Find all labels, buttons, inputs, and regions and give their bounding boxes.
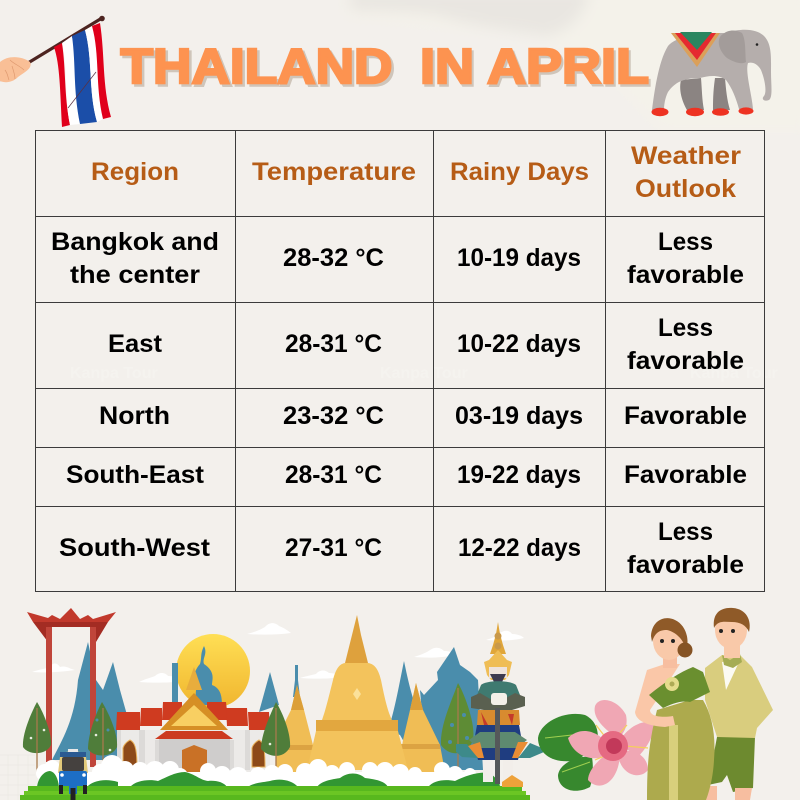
row: South-West: 12-22 days: [458, 534, 581, 562]
row: East: Less: [658, 314, 713, 342]
weather table: [35, 130, 765, 592]
faint grid patch: [0, 755, 35, 800]
row: South-West: favorable: [627, 551, 744, 579]
row: North: 23-32 °C: [283, 402, 384, 430]
giant swing: [27, 608, 116, 767]
row: South-East: 28-31 °C: [285, 461, 382, 489]
title: THAILAND: [120, 40, 392, 94]
table header row: Weather: [631, 142, 741, 170]
couple in traditional dress: [635, 608, 773, 800]
row: Bangkok and the center: the center: [70, 261, 200, 289]
row: East: 28-31 °C: [285, 330, 382, 358]
row: South-West: [59, 518, 744, 579]
icon: hand holding Thai flag: [0, 16, 111, 127]
row: South-East: 19-22 days: [457, 461, 581, 489]
watermark: [70, 365, 778, 382]
table header row: Rainy Days: [450, 158, 589, 186]
row: South-West: 27-31 °C: [285, 534, 382, 562]
row: East: East: [108, 330, 163, 358]
row: South-West: Less: [658, 518, 713, 546]
icon: decorated elephant: [652, 30, 772, 116]
row: Bangkok and the center: favorable: [627, 261, 744, 289]
tuk tuk: [58, 749, 88, 800]
illustration: Thai landscape: [20, 608, 773, 800]
watermark: Kanpa Tour: [690, 365, 778, 382]
row: South-East: [66, 461, 747, 489]
row: Bangkok and the center: Bangkok and: [51, 228, 219, 256]
row: North: 03-19 days: [455, 402, 583, 430]
title: IN APRIL: [420, 40, 649, 94]
row: North: Favorable: [624, 402, 747, 430]
row: North: North: [99, 402, 170, 430]
row: Bangkok and the center: 10-19 days: [457, 244, 581, 272]
table header row: [91, 142, 741, 203]
sun: [176, 634, 250, 708]
giant guardian statue: [456, 622, 544, 787]
row: North: [99, 402, 747, 430]
title: [120, 40, 651, 96]
small clouds: [32, 623, 524, 683]
man: [703, 608, 773, 800]
plumeria flower with leaves: [538, 700, 653, 791]
woman: [635, 618, 715, 800]
row: Bangkok and the center: [51, 228, 744, 289]
paper texture top right: [345, 0, 800, 130]
table header row: Outlook: [635, 175, 736, 203]
table header row: Temperature: [252, 158, 416, 186]
golden stupas: [276, 615, 445, 772]
row: Bangkok and the center: 28-32 °C: [283, 244, 384, 272]
white clouds and green bushes: [20, 755, 530, 800]
row: East: [108, 314, 744, 375]
watermark: Kanpa Tour: [380, 365, 468, 382]
title: IN APRIL: [422, 42, 651, 96]
title: THAILAND: [123, 42, 395, 96]
trees: [23, 683, 474, 772]
blue mountains: [52, 642, 483, 770]
table grid: [35, 130, 765, 592]
row: South-East: South-East: [66, 461, 205, 489]
row: Bangkok and the center: Less: [658, 228, 713, 256]
row: East: 10-22 days: [457, 330, 581, 358]
temple: [116, 667, 270, 774]
row: South-East: Favorable: [624, 461, 747, 489]
table header row: Region: [91, 158, 179, 186]
row: East: favorable: [627, 347, 744, 375]
row: South-West: South-West: [59, 534, 211, 562]
watermark: Kanpa Tour: [70, 365, 158, 382]
